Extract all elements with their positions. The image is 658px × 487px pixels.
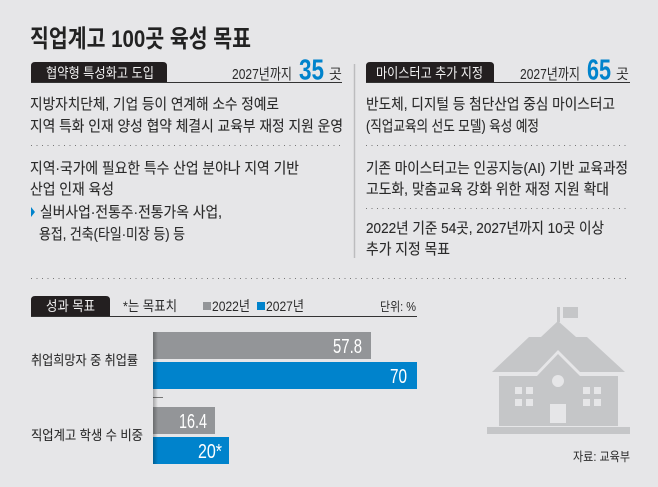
left text block 2: 산업 인재 육성	[30, 181, 114, 198]
bar: 2022 share 16.4: 16.4	[179, 411, 207, 433]
right target count	[520, 54, 629, 86]
performance tab heading: 성과 목표	[46, 298, 95, 314]
right text block 2	[366, 160, 628, 198]
left target count: 2027년까지	[232, 66, 292, 83]
right target count: 곳	[616, 66, 629, 82]
icon: blue triangle bullet	[31, 207, 35, 217]
right text block 2: 기존 마이스터고는 인공지능(AI) 기반 교육과정	[366, 160, 628, 177]
right text block 3: 2022년 기준 54곳, 2027년까지 10곳 이상	[366, 220, 604, 237]
right text block 1	[366, 96, 615, 135]
title: 직업계고 100곳 육성 목표	[30, 25, 251, 53]
left example list: 실버사업·전통주·전통가옥 사업,	[40, 204, 222, 221]
panel: right meister school	[366, 54, 630, 258]
right target count: 65	[587, 54, 611, 86]
category label: employment rate: 취업희망자 중 취업률	[31, 353, 138, 368]
bar: 2027 employment 70: 70	[390, 366, 407, 388]
icon: school building	[487, 307, 630, 434]
bar: 2027 share 20: 20*	[198, 441, 222, 463]
left target count	[232, 54, 342, 86]
legend: 2027년	[266, 298, 304, 314]
bar: 2022 share 16.4	[153, 407, 215, 434]
right text block 2: 고도화, 맞춤교육 강화 위한 재정 지원 확대	[366, 181, 609, 198]
unit: 단위: %	[380, 300, 416, 314]
left text block 1: 지방자치단체, 기업 등이 연계해 소수 정예로	[30, 96, 279, 113]
bar: 2022 employment 57.8	[153, 332, 371, 359]
panel: performance targets	[31, 296, 417, 464]
left tab heading: 협약형 특성화고 도입	[46, 65, 154, 81]
left example list: 용접, 건축(타일·미장 등) 등	[39, 226, 185, 243]
left text block 2: 지역·국가에 필요한 특수 산업 분야나 지역 기반	[30, 160, 299, 177]
right text block 1: (직업교육의 선도 모델) 육성 예정	[366, 118, 539, 135]
source: 자료: 교육부	[573, 450, 630, 464]
legend: 2022년	[212, 298, 250, 314]
left text block 1	[30, 96, 343, 135]
panel: left specialised high school	[30, 54, 343, 243]
right target count: 2027년까지	[520, 66, 580, 83]
target note: *는 목표치	[123, 298, 177, 314]
bar chart	[31, 332, 417, 464]
left text block 2	[30, 160, 299, 198]
right tab heading: 마이스터고 추가 지정	[376, 65, 483, 81]
right text block 1: 반도체, 디지털 등 첨단산업 중심 마이스터고	[366, 96, 615, 113]
right text block 3: 추가 지정 목표	[366, 241, 450, 258]
bar: 2027 employment 70	[153, 362, 417, 389]
left text block 1: 지역 특화 인재 양성 협약 체결시 교육부 재정 지원 운영	[30, 118, 343, 135]
legend	[203, 298, 304, 314]
left target count: 35	[299, 54, 324, 86]
bar: 2022 employment 57.8: 57.8	[333, 336, 362, 358]
category label: student share: 직업계고 학생 수 비중	[31, 428, 143, 443]
left example list	[39, 204, 222, 243]
right text block 3	[366, 220, 604, 258]
left target count: 곳	[329, 66, 342, 82]
bar: 2027 share 20	[153, 437, 229, 464]
performance tab heading	[31, 296, 110, 316]
